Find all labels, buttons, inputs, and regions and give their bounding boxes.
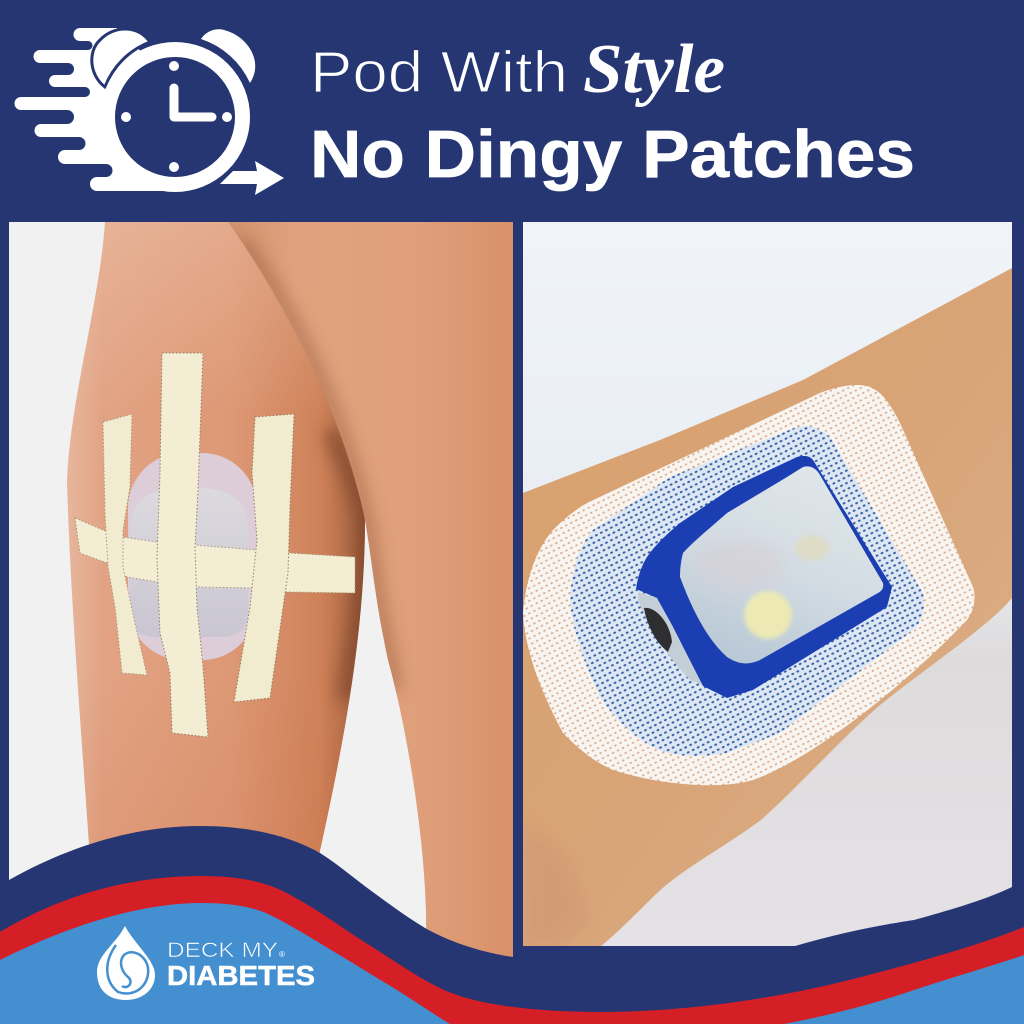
logo: Deck My Diabetes <box>97 926 315 1000</box>
tape strip: horizontal <box>75 518 355 593</box>
wave: light blue base right <box>784 955 1024 1024</box>
tape strip: left <box>103 414 147 675</box>
pod: blue frame <box>636 456 892 698</box>
arm <box>523 268 1012 946</box>
patch: white mesh <box>523 385 975 785</box>
panel: photo of arm with blue pod cover <box>523 222 1012 946</box>
patch: blue mesh ring <box>570 426 924 756</box>
wave: navy band <box>0 826 1024 1024</box>
pod: milky window <box>680 466 883 663</box>
wave: light blue base left <box>0 903 450 1024</box>
title: Pod With Style <box>310 31 725 108</box>
heading: No Dingy Patches: No Dingy Patches <box>310 117 915 192</box>
logo text: DIABETES: DIABETES <box>167 960 315 991</box>
back thigh shadow <box>330 430 366 700</box>
crease shadow on front thigh <box>240 240 395 690</box>
arm: reddened lower skin <box>538 856 576 934</box>
pod: upper yellow smudge <box>795 535 829 561</box>
leg: back thigh <box>67 222 365 860</box>
pod: grey side <box>638 592 703 685</box>
title: Pod With Style: Style <box>583 31 725 108</box>
pod <box>130 487 248 637</box>
panel: photo of leg with tape strips over pod <box>9 222 513 962</box>
icon: water drop <box>97 926 155 1000</box>
pod: yellow spot <box>744 591 792 639</box>
tape strip: right <box>234 414 294 702</box>
patch under pod <box>128 453 257 660</box>
back thigh vertical shading <box>86 222 309 844</box>
icon: speeding alarm clock <box>15 28 284 195</box>
pod: inner glow <box>714 549 767 578</box>
pod: dark port <box>644 608 672 652</box>
title: Pod With Style: Pod With <box>310 40 568 105</box>
tape strip: center <box>157 353 208 737</box>
wave: red stripe <box>0 876 1024 1024</box>
logo mark: registered: ® <box>279 950 285 959</box>
logo text: DECK MY: DECK MY <box>167 939 278 962</box>
leg: front thigh <box>200 222 513 962</box>
